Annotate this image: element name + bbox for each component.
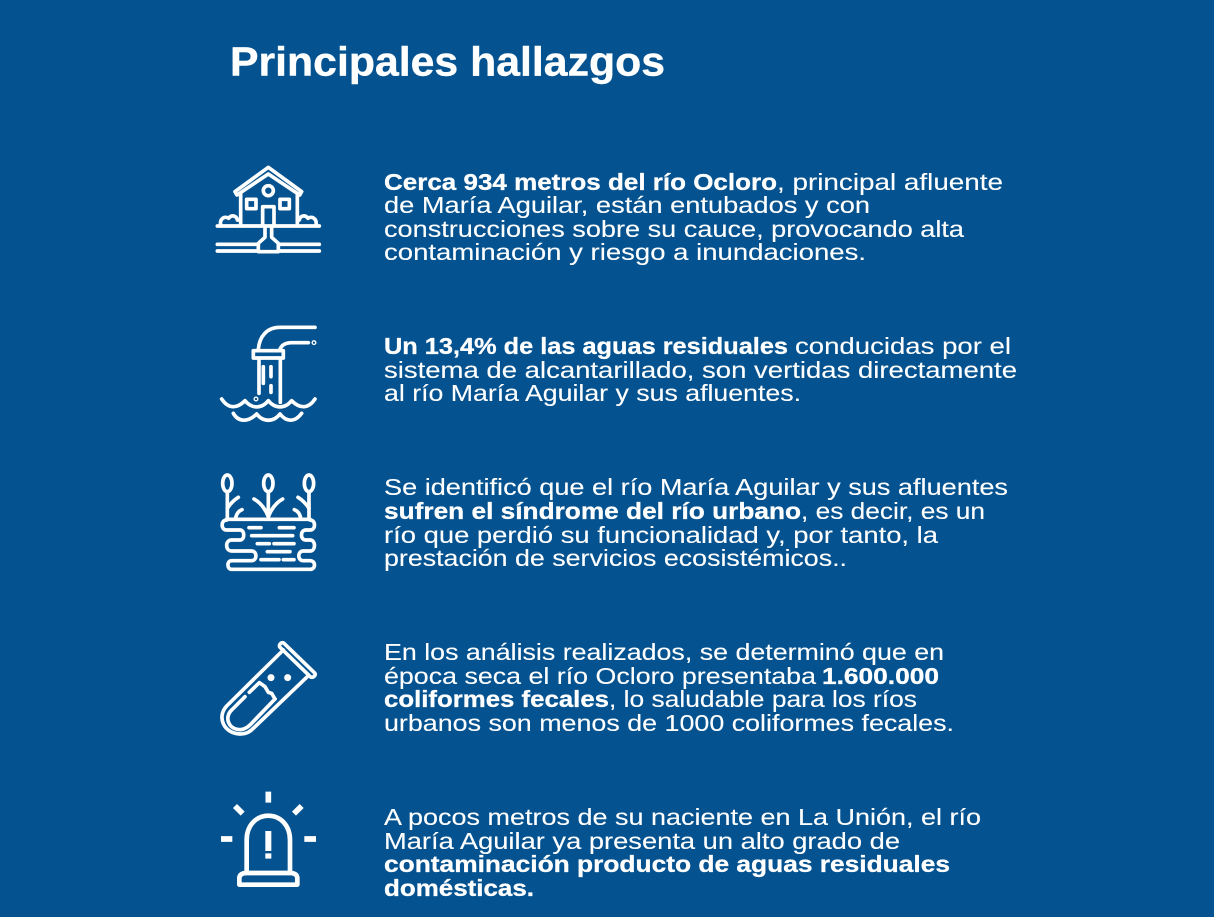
text block: síndrome del río urbano: sufren el síndrome del río urbano [384, 498, 801, 524]
text block: síndrome del río urbano: prestación de servicios ecosistémicos.. [384, 545, 847, 571]
text block: síndrome del río urbano: , es decir, es un [801, 498, 985, 524]
text block: aguas residuales: Un 13,4% de las aguas residuales [384, 333, 788, 359]
text block: síndrome del río urbano: río que perdió su funcionalidad y, por tanto, la [384, 522, 939, 548]
text block: entubado: contaminación y riesgo a inundaciones. [384, 239, 866, 265]
text block: coliformes fecales: En los análisis realizados, se determinó que en [384, 639, 944, 665]
text block: aguas residuales [384, 333, 1017, 406]
text block: entubado [384, 169, 1003, 265]
text block: entubado: de María Aguilar, están entubados y con [384, 192, 870, 218]
text block: contaminación: A pocos metros de su naciente en La Unión, el río [384, 804, 981, 830]
text block: aguas residuales: sistema de alcantarillado, son vertidas directamente [384, 357, 1017, 383]
text block: aguas residuales: al río María Aguilar y sus afluentes. [384, 380, 801, 406]
text block: contaminación: contaminación producto de aguas residuales [384, 851, 950, 877]
text block: coliformes fecales: época seca el río Ocloro presentaba [384, 663, 817, 689]
text block: aguas residuales: conducidas por el [795, 333, 1011, 359]
icon: discharge pipe over water [222, 327, 315, 420]
text block: entubado: construcciones sobre su cauce, provocando alta [384, 216, 965, 242]
icon: river with reeds [222, 475, 314, 569]
text block: contaminación [384, 804, 981, 901]
title: Principales hallazgos [230, 38, 665, 84]
icon: house over pipe [217, 167, 319, 252]
text block: síndrome del río urbano: Se identificó que el río María Aguilar y sus afluentes [384, 474, 1008, 500]
text block: coliformes fecales: urbanos son menos de 1000 coliformes fecales. [384, 710, 954, 736]
text block: síndrome del río urbano [384, 474, 1008, 571]
icon: alarm siren [221, 792, 316, 885]
text block: coliformes fecales: 1.600.000 [822, 663, 939, 689]
text block: coliformes fecales [384, 639, 954, 736]
text block: entubado: , principal afluente [777, 169, 1003, 195]
icon: test tube [222, 643, 315, 734]
text block: coliformes fecales: coliformes fecales [384, 686, 609, 712]
text block: entubado: Cerca 934 metros del río Ocloro [384, 169, 777, 195]
text block: coliformes fecales: , lo saludable para los ríos [609, 686, 917, 712]
text block: contaminación: María Aguilar ya presenta un alto grado de [384, 828, 900, 854]
text block: contaminación: domésticas. [384, 875, 534, 901]
